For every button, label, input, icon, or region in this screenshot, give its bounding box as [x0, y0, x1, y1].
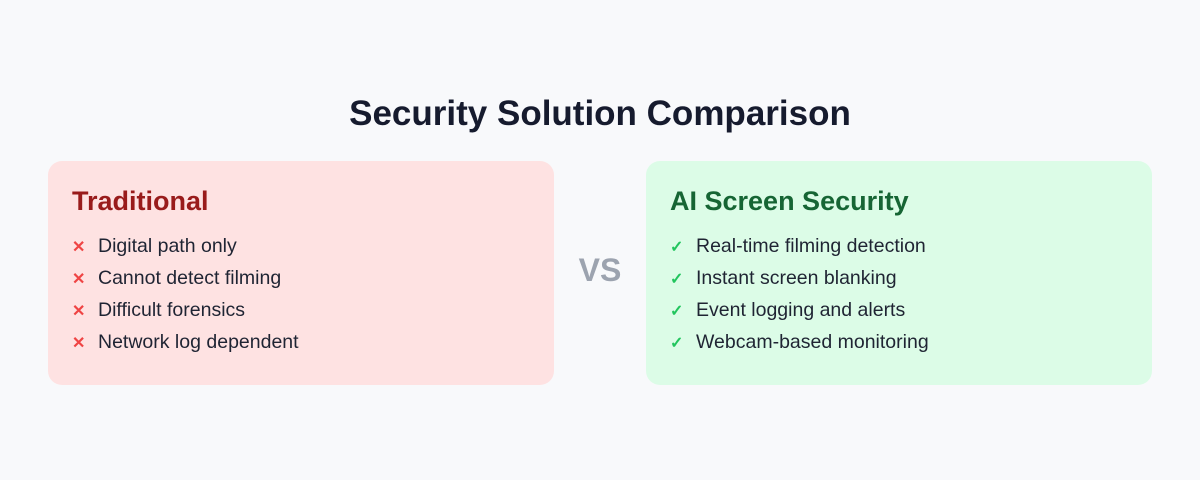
vs label: VS — [579, 252, 621, 288]
heading: AI screen security: AI Screen Security — [670, 186, 909, 216]
list: AI benefits — [670, 235, 929, 353]
list: traditional drawbacks: Digital path only — [98, 235, 237, 257]
list: traditional drawbacks: ✕ — [72, 271, 85, 288]
panel: traditional — [48, 161, 554, 385]
list: traditional drawbacks: Network log dependent — [98, 331, 299, 353]
list: AI benefits: ✓ — [670, 303, 683, 320]
heading: traditional: Traditional — [72, 186, 209, 216]
list: AI benefits: ✓ — [670, 335, 683, 352]
panel: AI screen security — [646, 161, 1152, 385]
list: AI benefits: ✓ — [670, 239, 683, 256]
list: traditional drawbacks: ✕ — [72, 303, 85, 320]
list: traditional drawbacks — [72, 235, 299, 353]
list: AI benefits: Event logging and alerts — [696, 299, 905, 321]
list: traditional drawbacks: ✕ — [72, 239, 85, 256]
list: AI benefits: Webcam-based monitoring — [696, 331, 929, 353]
list: AI benefits: ✓ — [670, 271, 683, 288]
list: traditional drawbacks: ✕ — [72, 335, 85, 352]
list: AI benefits: Instant screen blanking — [696, 267, 897, 289]
title: Security Solution Comparison — [349, 94, 851, 133]
list: AI benefits: Real-time filming detection — [696, 235, 926, 257]
list: traditional drawbacks: Cannot detect filming — [98, 267, 281, 289]
list: traditional drawbacks: Difficult forensics — [98, 299, 245, 321]
